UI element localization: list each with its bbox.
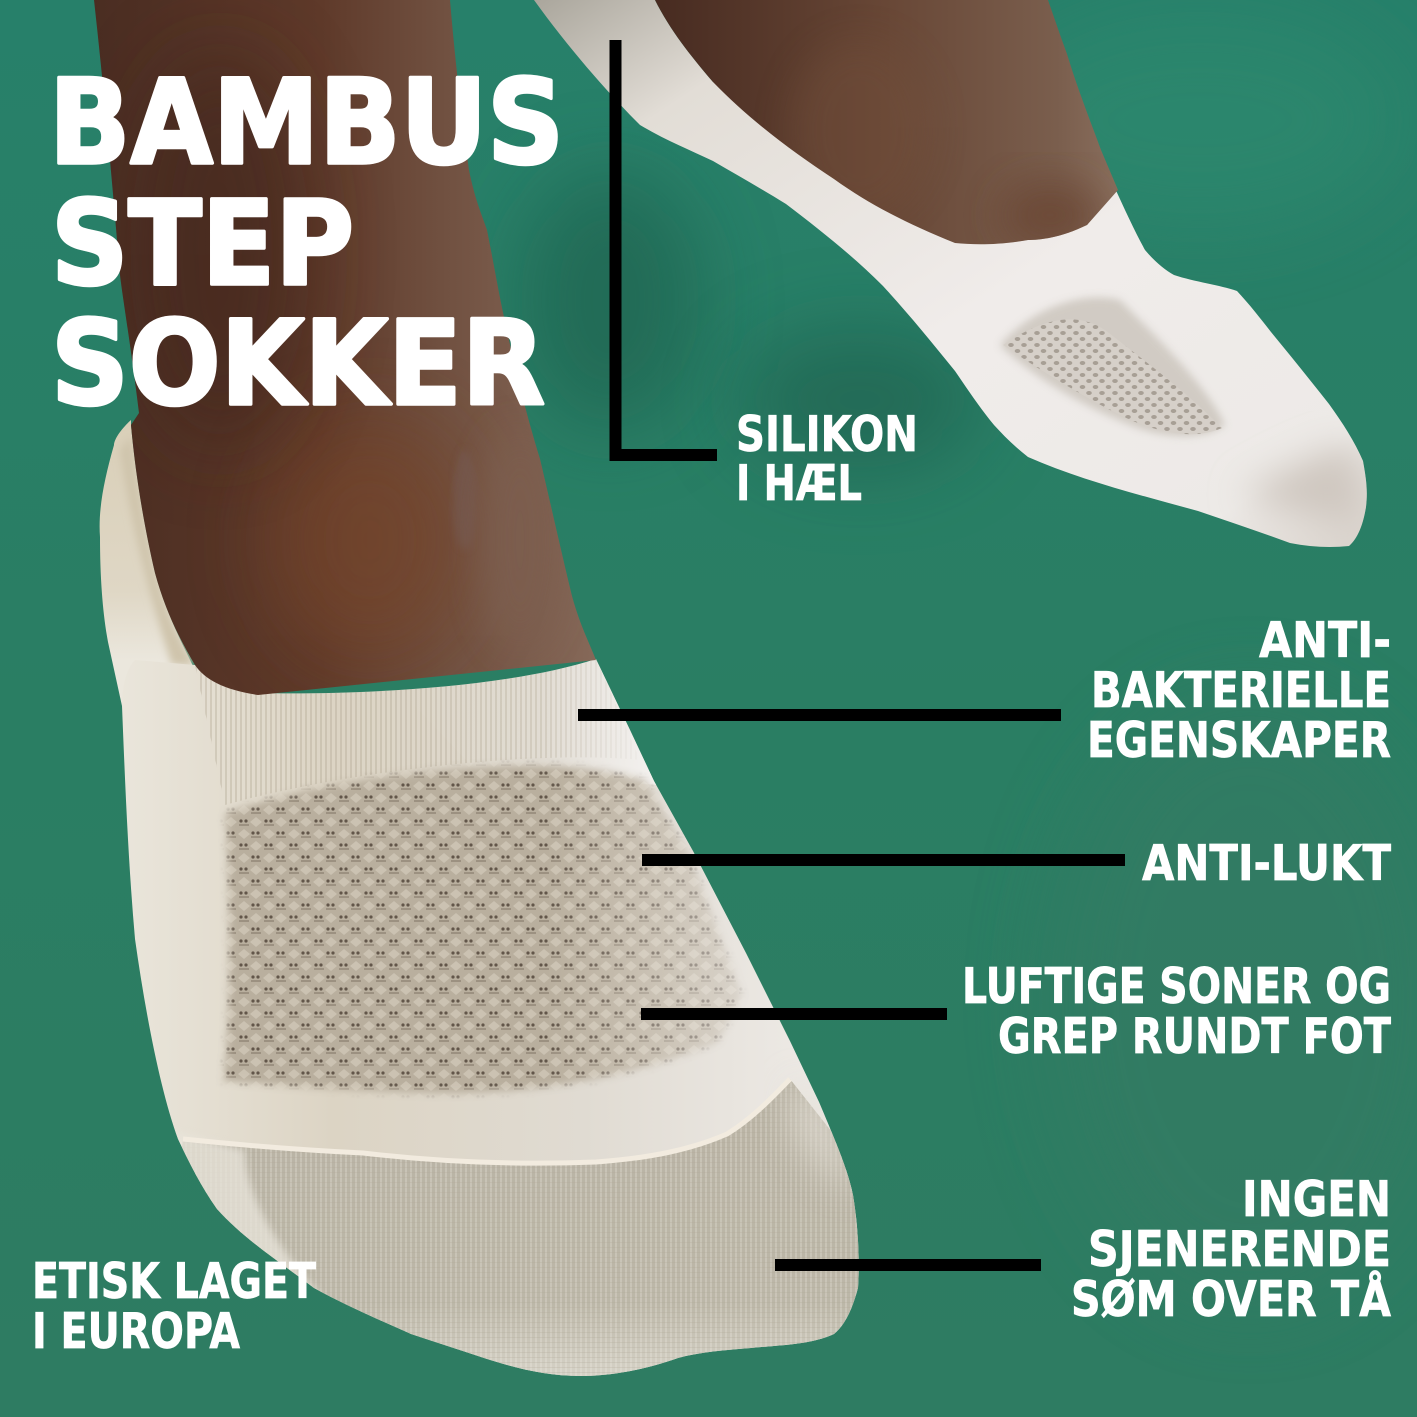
arrow: søm leader line xyxy=(775,1259,1041,1271)
label: ingen sjenerende søm over tå xyxy=(1071,1171,1391,1328)
callout: anti-lukt xyxy=(642,835,1391,892)
label: etisk laget i europa: ETISK LAGET xyxy=(32,1253,316,1310)
title: STEP xyxy=(51,175,354,312)
rear toe shade xyxy=(1240,445,1365,530)
callout: antibakterielle egenskaper xyxy=(578,612,1391,769)
photo: front leg skin xyxy=(90,0,605,700)
sock body xyxy=(100,650,880,1400)
label: antibakterielle egenskaper xyxy=(1087,612,1391,769)
label: ingen sjenerende søm over tå: INGEN xyxy=(1242,1171,1391,1228)
arrow: anti-lukt leader line xyxy=(642,854,1125,866)
photo: front sock xyxy=(100,420,880,1400)
arrow: antibakterielle leader line xyxy=(578,709,1061,721)
title: BAMBUS xyxy=(49,54,564,191)
label: silikon i hæl xyxy=(736,406,918,512)
mesh zone xyxy=(220,760,744,1098)
collar white side xyxy=(546,659,656,785)
rear sock xyxy=(530,0,1370,550)
toe right highlight xyxy=(782,1086,850,1184)
collar ribs xyxy=(195,659,640,805)
toe left highlight xyxy=(174,1130,320,1291)
callout: silikon i hæl xyxy=(616,40,918,512)
mesh light fade xyxy=(566,772,746,1078)
title: SOKKER xyxy=(51,295,545,432)
label: antibakterielle egenskaper: ANTI- xyxy=(1259,612,1391,669)
label: silikon i hæl: I HÆL xyxy=(736,455,862,512)
arrow: silikon leader line xyxy=(616,40,717,455)
label: etisk laget i europa: I EUROPA xyxy=(32,1303,240,1360)
toe cap xyxy=(182,1079,859,1376)
right grey skin xyxy=(494,452,556,562)
rear sock mesh dots xyxy=(1003,319,1222,434)
floor shadows xyxy=(520,10,1417,1300)
toe knit xyxy=(186,1081,856,1376)
seam xyxy=(183,1079,790,1163)
arrow: luftige soner leader line xyxy=(641,1008,947,1020)
warm ankle tone xyxy=(270,447,470,632)
rear leg skin xyxy=(640,0,1130,250)
heel liner shade xyxy=(120,436,195,665)
callout: luftige soner xyxy=(641,958,1391,1065)
upper left dark tone xyxy=(160,82,313,426)
photo: rear foot with sock xyxy=(530,0,1370,550)
ankle bone xyxy=(454,454,474,546)
rear sock mesh glow xyxy=(1000,297,1225,436)
label: luftige soner og grep rundt fot xyxy=(962,958,1391,1065)
label: etisk laget i europa xyxy=(32,1253,316,1360)
callout: ingen sjenerende søm xyxy=(775,1171,1391,1328)
inner heel xyxy=(100,420,200,706)
label: silikon i hæl: SILIKON xyxy=(736,406,918,463)
title xyxy=(49,54,564,432)
